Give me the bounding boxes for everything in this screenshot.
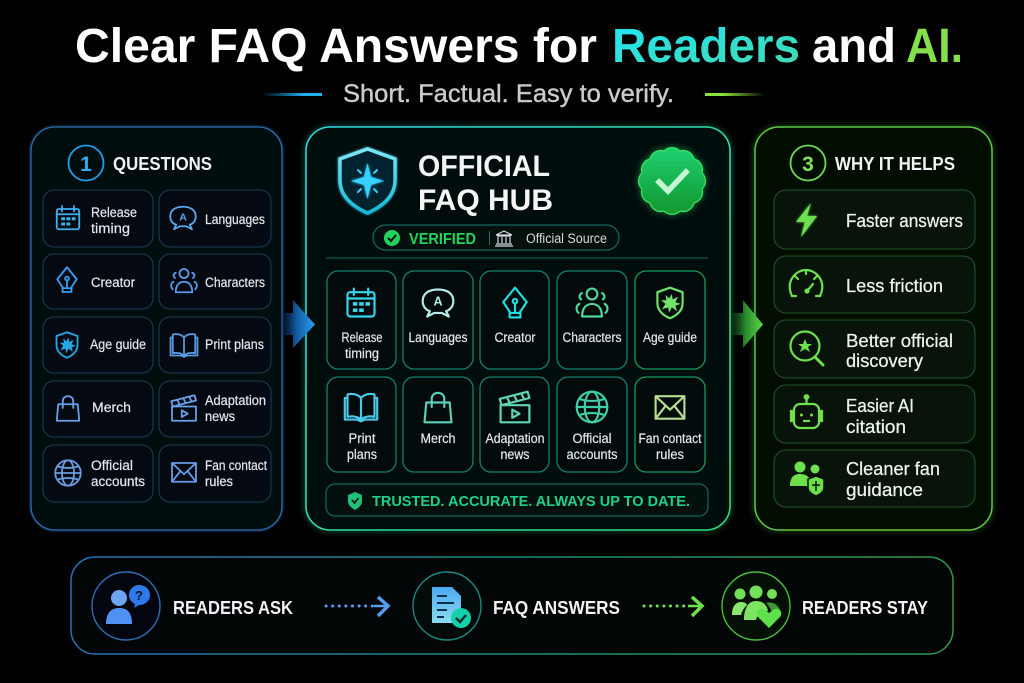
heading: why it helps: WHY IT HELPS bbox=[835, 154, 955, 174]
card: age guide bbox=[43, 317, 153, 373]
card: creator: Creator bbox=[91, 275, 135, 290]
card: adaptation news: news bbox=[205, 409, 235, 424]
hub card: adaptation news: Adaptation bbox=[486, 431, 544, 446]
title: Clear FAQ Answers for bbox=[75, 20, 597, 73]
card: official accounts: Official bbox=[91, 458, 133, 473]
card: easier ai citation: Easier AI bbox=[846, 396, 914, 416]
card: cleaner fan guidance: guidance bbox=[846, 480, 923, 500]
card: creator bbox=[43, 254, 153, 309]
card: less friction bbox=[774, 256, 975, 313]
hub card: fan contact rules: Fan contact bbox=[638, 431, 702, 446]
heading: official faq hub: OFFICIAL bbox=[418, 150, 550, 183]
icon: hub shield bbox=[340, 149, 395, 213]
hub card: adaptation news: news bbox=[500, 447, 530, 462]
card: release timing: Release bbox=[91, 205, 137, 220]
heading: questions: QUESTIONS bbox=[113, 154, 212, 174]
hub card: age guide bbox=[635, 271, 705, 369]
card: merch: Merch bbox=[92, 400, 131, 415]
card: better official discovery bbox=[774, 320, 975, 378]
step: faq answers: FAQ ANSWERS bbox=[493, 598, 620, 618]
arrow: dotted green bbox=[644, 597, 702, 616]
card: less friction: Less friction bbox=[846, 276, 943, 296]
icon: reader with question: ? bbox=[135, 588, 143, 603]
icon: reader with question bbox=[106, 585, 150, 624]
hub card: characters: Characters bbox=[562, 330, 622, 345]
step number 1 bbox=[68, 146, 104, 180]
hub card: languages bbox=[403, 271, 473, 369]
icon: document check bbox=[432, 587, 471, 628]
icon: robot bbox=[791, 395, 822, 428]
hub card: print plans: Print bbox=[348, 431, 376, 446]
hub card: characters bbox=[557, 271, 627, 369]
hub card: official accounts bbox=[557, 377, 627, 472]
card: cleaner fan guidance bbox=[774, 450, 975, 507]
card: characters bbox=[159, 254, 271, 309]
card: print plans: Print plans bbox=[205, 337, 264, 352]
card: characters: Characters bbox=[205, 275, 265, 290]
step: readers ask bbox=[92, 572, 293, 640]
hub card: print plans bbox=[327, 377, 396, 472]
step: readers ask: READERS ASK bbox=[173, 598, 293, 618]
icon: magnifier star bbox=[790, 332, 823, 365]
title: and bbox=[812, 20, 896, 73]
panel: questions bbox=[31, 127, 282, 530]
hub card: merch bbox=[403, 377, 473, 472]
panel: official faq hub bbox=[306, 127, 730, 530]
icon: verified badge bbox=[639, 148, 705, 214]
card: adaptation news bbox=[159, 381, 271, 437]
card: official accounts bbox=[43, 445, 153, 502]
hub card: release timing: timing bbox=[345, 346, 379, 361]
card: age guide: Age guide bbox=[90, 337, 146, 352]
icon: gauge bbox=[790, 270, 822, 296]
step number 3 bbox=[790, 146, 826, 180]
verified pill: VERIFIED bbox=[409, 231, 476, 248]
icon: verified check bbox=[384, 230, 400, 246]
hub card: official accounts: accounts bbox=[566, 447, 618, 462]
card: merch bbox=[43, 381, 153, 437]
icon: community heart bbox=[732, 586, 781, 628]
hub card: adaptation news bbox=[480, 377, 549, 472]
panel: reader flow bbox=[71, 557, 953, 654]
arrow: dotted blue bbox=[326, 597, 388, 616]
card: fan contact rules: Fan contact bbox=[205, 458, 267, 473]
hub card: languages: Languages bbox=[408, 330, 468, 345]
icon: people shield bbox=[790, 462, 824, 496]
hub card: release timing bbox=[327, 271, 396, 369]
step number 1: 1 bbox=[80, 153, 92, 176]
title: Readers bbox=[612, 20, 800, 73]
card: fan contact rules bbox=[159, 445, 271, 502]
step number 3: 3 bbox=[802, 153, 814, 176]
hub card: creator bbox=[480, 271, 549, 369]
subtitle: Short. Factual. Easy to verify. bbox=[343, 80, 674, 108]
icon: institution bbox=[495, 231, 513, 246]
card: cleaner fan guidance: Cleaner fan bbox=[846, 459, 940, 479]
title: AI. bbox=[906, 20, 963, 73]
verified pill bbox=[373, 225, 619, 250]
heading: official faq hub bbox=[418, 150, 553, 217]
verified pill: Official Source bbox=[526, 231, 607, 246]
card: better official discovery: Better official bbox=[846, 331, 953, 351]
hub card: merch: Merch bbox=[420, 431, 456, 446]
card: adaptation news: Adaptation bbox=[205, 393, 266, 408]
card: print plans bbox=[159, 317, 271, 373]
step: faq answers bbox=[413, 572, 620, 640]
step: readers stay bbox=[722, 572, 928, 640]
heading: official faq hub: FAQ HUB bbox=[418, 184, 553, 217]
card: easier ai citation bbox=[774, 385, 975, 443]
step: readers stay: READERS STAY bbox=[802, 598, 928, 618]
card: faster answers: Faster answers bbox=[846, 211, 963, 231]
card: languages bbox=[159, 190, 271, 247]
arrow: hub to benefits bbox=[731, 300, 763, 348]
icon: lightning bbox=[796, 203, 817, 237]
hub card: release timing: Release bbox=[342, 330, 382, 345]
card: fan contact rules: rules bbox=[205, 474, 233, 489]
hub card: official accounts: Official bbox=[572, 431, 612, 446]
icon: trusted shield bbox=[348, 492, 362, 510]
hub card: fan contact rules: rules bbox=[656, 447, 684, 462]
card: better official discovery: discovery bbox=[846, 351, 923, 371]
trusted banner bbox=[326, 484, 708, 516]
trusted banner: TRUSTED. ACCURATE. ALWAYS UP TO DATE. bbox=[372, 493, 690, 510]
hub card: fan contact rules bbox=[635, 377, 705, 472]
card: release timing bbox=[43, 190, 153, 247]
panel: why it helps bbox=[755, 127, 992, 530]
subtitle bbox=[262, 80, 765, 108]
title bbox=[75, 20, 963, 73]
card: easier ai citation: citation bbox=[846, 417, 906, 437]
hub card: age guide: Age guide bbox=[643, 330, 697, 345]
card: faster answers bbox=[774, 190, 975, 249]
hub card: creator: Creator bbox=[494, 330, 536, 345]
card: official accounts: accounts bbox=[91, 474, 145, 489]
card: languages: Languages bbox=[205, 212, 265, 227]
hub card: print plans: plans bbox=[347, 447, 377, 462]
arrow: questions to hub bbox=[280, 300, 315, 348]
card: release timing: timing bbox=[91, 221, 130, 236]
